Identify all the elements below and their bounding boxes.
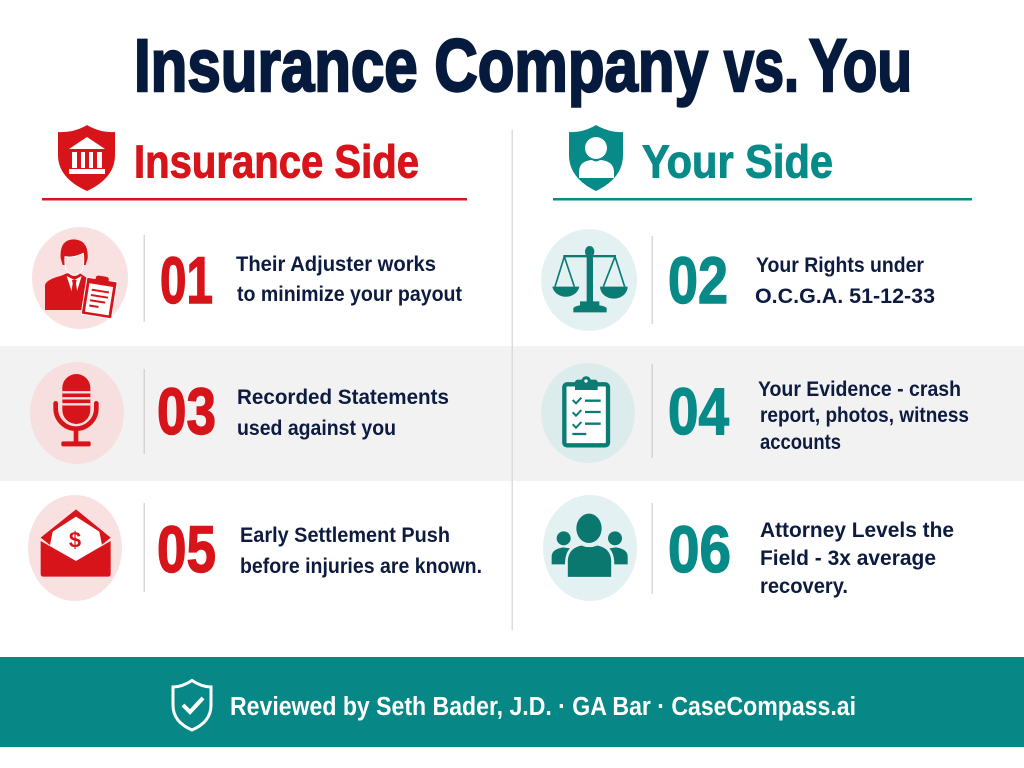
- text: attorney levels the field: [760, 518, 954, 598]
- text: your evidence: accounts: [760, 430, 841, 454]
- text: your evidence: [758, 377, 969, 454]
- icon: adjuster with clipboard: [32, 227, 128, 329]
- number 03: 03: [157, 374, 216, 448]
- row 04: your evidence: [541, 363, 969, 463]
- title: Insurance Company: [134, 24, 708, 107]
- row 03: recorded statements: [30, 362, 449, 464]
- row 02: your rights: [541, 229, 935, 331]
- row 06: attorney levels the field: [543, 495, 954, 601]
- number 04: 04: [668, 374, 729, 448]
- panel: insurance side: [28, 125, 482, 601]
- title: You: [809, 24, 912, 107]
- icon: group of people: [543, 495, 637, 601]
- text: their adjuster: to minimize your payout: [237, 282, 462, 306]
- row 01: adjuster: [32, 227, 462, 329]
- text: attorney levels the field: Field - 3x average: [760, 546, 936, 570]
- title: vs.: [724, 24, 799, 107]
- text: recorded statements: Recorded Statements: [237, 385, 449, 409]
- text: your evidence: report, photos, witness: [760, 403, 969, 427]
- text: attorney levels the field: recovery.: [760, 574, 848, 598]
- text: early settlement: before injuries are known.: [240, 554, 482, 578]
- text: their adjuster: [236, 252, 462, 306]
- footer text: Reviewed by Seth Bader, J.D. · GA Bar · CaseCompass.ai: [230, 693, 856, 721]
- text: their adjuster: Their Adjuster works: [236, 252, 436, 276]
- text: attorney levels the field: Attorney Levels the: [760, 518, 954, 542]
- icon: microphone: [30, 362, 124, 464]
- text: your rights: Your Rights under: [756, 253, 925, 277]
- number 02: 02: [668, 243, 728, 317]
- icon: envelope with dollar: $: [69, 528, 81, 553]
- text: recorded statements: [237, 385, 449, 440]
- text: early settlement: Early Settlement Push: [240, 523, 450, 547]
- row 05: early settlement: [28, 495, 482, 601]
- icon: your shield with person: [569, 125, 623, 191]
- icon: envelope with dollar: [28, 495, 122, 601]
- icon: check shield: [173, 680, 211, 730]
- text: early settlement: [240, 523, 482, 578]
- number 01: 01: [160, 243, 213, 317]
- text: recorded statements: used against you: [237, 416, 396, 440]
- text: your rights: O.C.G.A. 51-12-33: [755, 284, 935, 308]
- icon: scales of justice: [541, 229, 637, 331]
- footer band: [0, 657, 1024, 747]
- panel: your side: [541, 125, 972, 601]
- heading: insurance side: Insurance Side: [134, 136, 419, 188]
- number 05: 05: [157, 512, 216, 586]
- number 06: 06: [668, 512, 731, 586]
- icon: insurance shield with bank: [58, 125, 115, 191]
- text: your evidence: Your Evidence - crash: [758, 377, 961, 401]
- heading: your side: Your Side: [642, 136, 833, 188]
- icon: checklist clipboard: [541, 363, 635, 463]
- text: your rights: [755, 253, 935, 308]
